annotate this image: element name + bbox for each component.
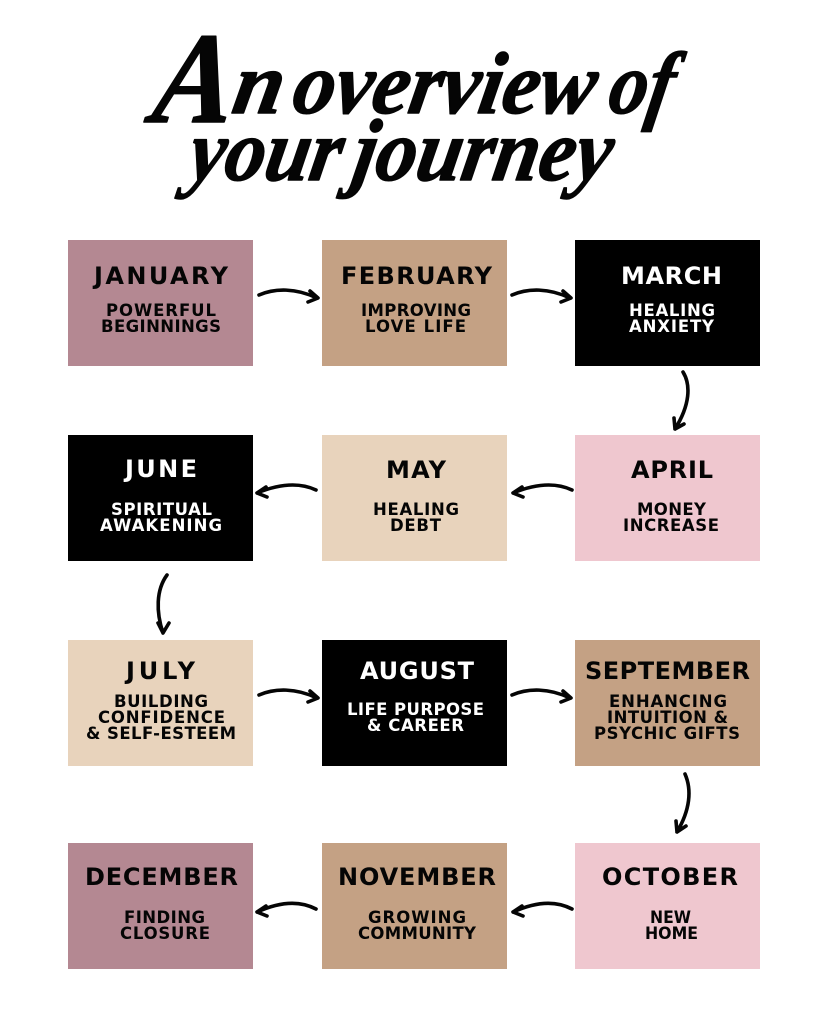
panel: March: ANXIETY [629, 317, 715, 336]
panel: December: CLOSURE [120, 924, 210, 943]
panel: September [575, 640, 760, 766]
title: of [603, 36, 690, 133]
title [140, 8, 690, 200]
panel: March [575, 240, 760, 366]
arrow: May to June [257, 485, 316, 497]
panel: October: OCTOBER [602, 863, 738, 891]
title: journey [335, 103, 622, 200]
panel: July: CONFIDENCE [98, 708, 225, 727]
arrow: January to February [259, 290, 318, 302]
arrow: April to May [513, 485, 572, 497]
panel: January: BEGINNINGS [101, 317, 221, 336]
panel: December: FINDING [124, 908, 205, 927]
arrow: August to September [512, 690, 571, 702]
panel: March: HEALING [629, 301, 715, 320]
panel: June: JUNE [123, 455, 197, 483]
panel: March: MARCH [621, 262, 722, 290]
panel: April [575, 435, 760, 561]
panel: July [68, 640, 253, 766]
panel: May: HEALING [373, 500, 459, 519]
panel: June [68, 435, 253, 561]
panel: August: AUGUST [360, 657, 475, 685]
panel: June: AWAKENING [100, 516, 222, 535]
panel: February [322, 240, 507, 366]
panel: September: SEPTEMBER [585, 657, 750, 685]
panel: October: NEW [650, 908, 691, 927]
panel: August [322, 640, 507, 766]
panel: February: FEBRUARY [341, 262, 493, 290]
panel: November: COMMUNITY [358, 924, 477, 943]
panel: August: LIFE PURPOSE [347, 700, 484, 719]
panel: January: POWERFUL [106, 301, 216, 320]
title: overview [287, 36, 606, 133]
panel: May: MAY [386, 456, 447, 484]
arrow: March to April [674, 372, 688, 429]
panel: January: JANUARY [92, 262, 229, 290]
title: n [227, 36, 294, 133]
title: A [140, 8, 246, 151]
panel: September: ENHANCING [609, 692, 727, 711]
panel: December [68, 843, 253, 969]
panel: November: GROWING [368, 908, 466, 927]
panel: September: PSYCHIC GIFTS [594, 724, 740, 743]
panel: July: & SELF-ESTEEM [86, 724, 236, 743]
panel: October: HOME [645, 924, 698, 943]
panel: November [322, 843, 507, 969]
panel: April: APRIL [631, 456, 713, 484]
panel: September: INTUITION & [607, 708, 728, 727]
arrow: November to December [257, 903, 316, 916]
arrow: October to November [513, 903, 572, 916]
arrow: September to October [676, 774, 689, 832]
panel: June: SPIRITUAL [111, 500, 212, 519]
panel: May: DEBT [390, 516, 442, 535]
panel: December: DECEMBER [85, 863, 238, 891]
panel: July: BUILDING [114, 692, 208, 711]
panel: February: LOVE LIFE [365, 317, 466, 336]
panel: November: NOVEMBER [338, 863, 496, 891]
arrow: July to August [259, 690, 318, 702]
panel: October [575, 843, 760, 969]
panel: August: & CAREER [367, 716, 464, 735]
panel: January [68, 240, 253, 366]
panel: February: IMPROVING [361, 301, 471, 320]
arrow: February to March [512, 290, 571, 302]
title: your [174, 103, 353, 200]
panel: April: INCREASE [623, 516, 719, 535]
panel: April: MONEY [637, 500, 707, 519]
panel: May [322, 435, 507, 561]
panel: July: JULY [124, 657, 196, 685]
arrow: June to July [158, 575, 169, 633]
